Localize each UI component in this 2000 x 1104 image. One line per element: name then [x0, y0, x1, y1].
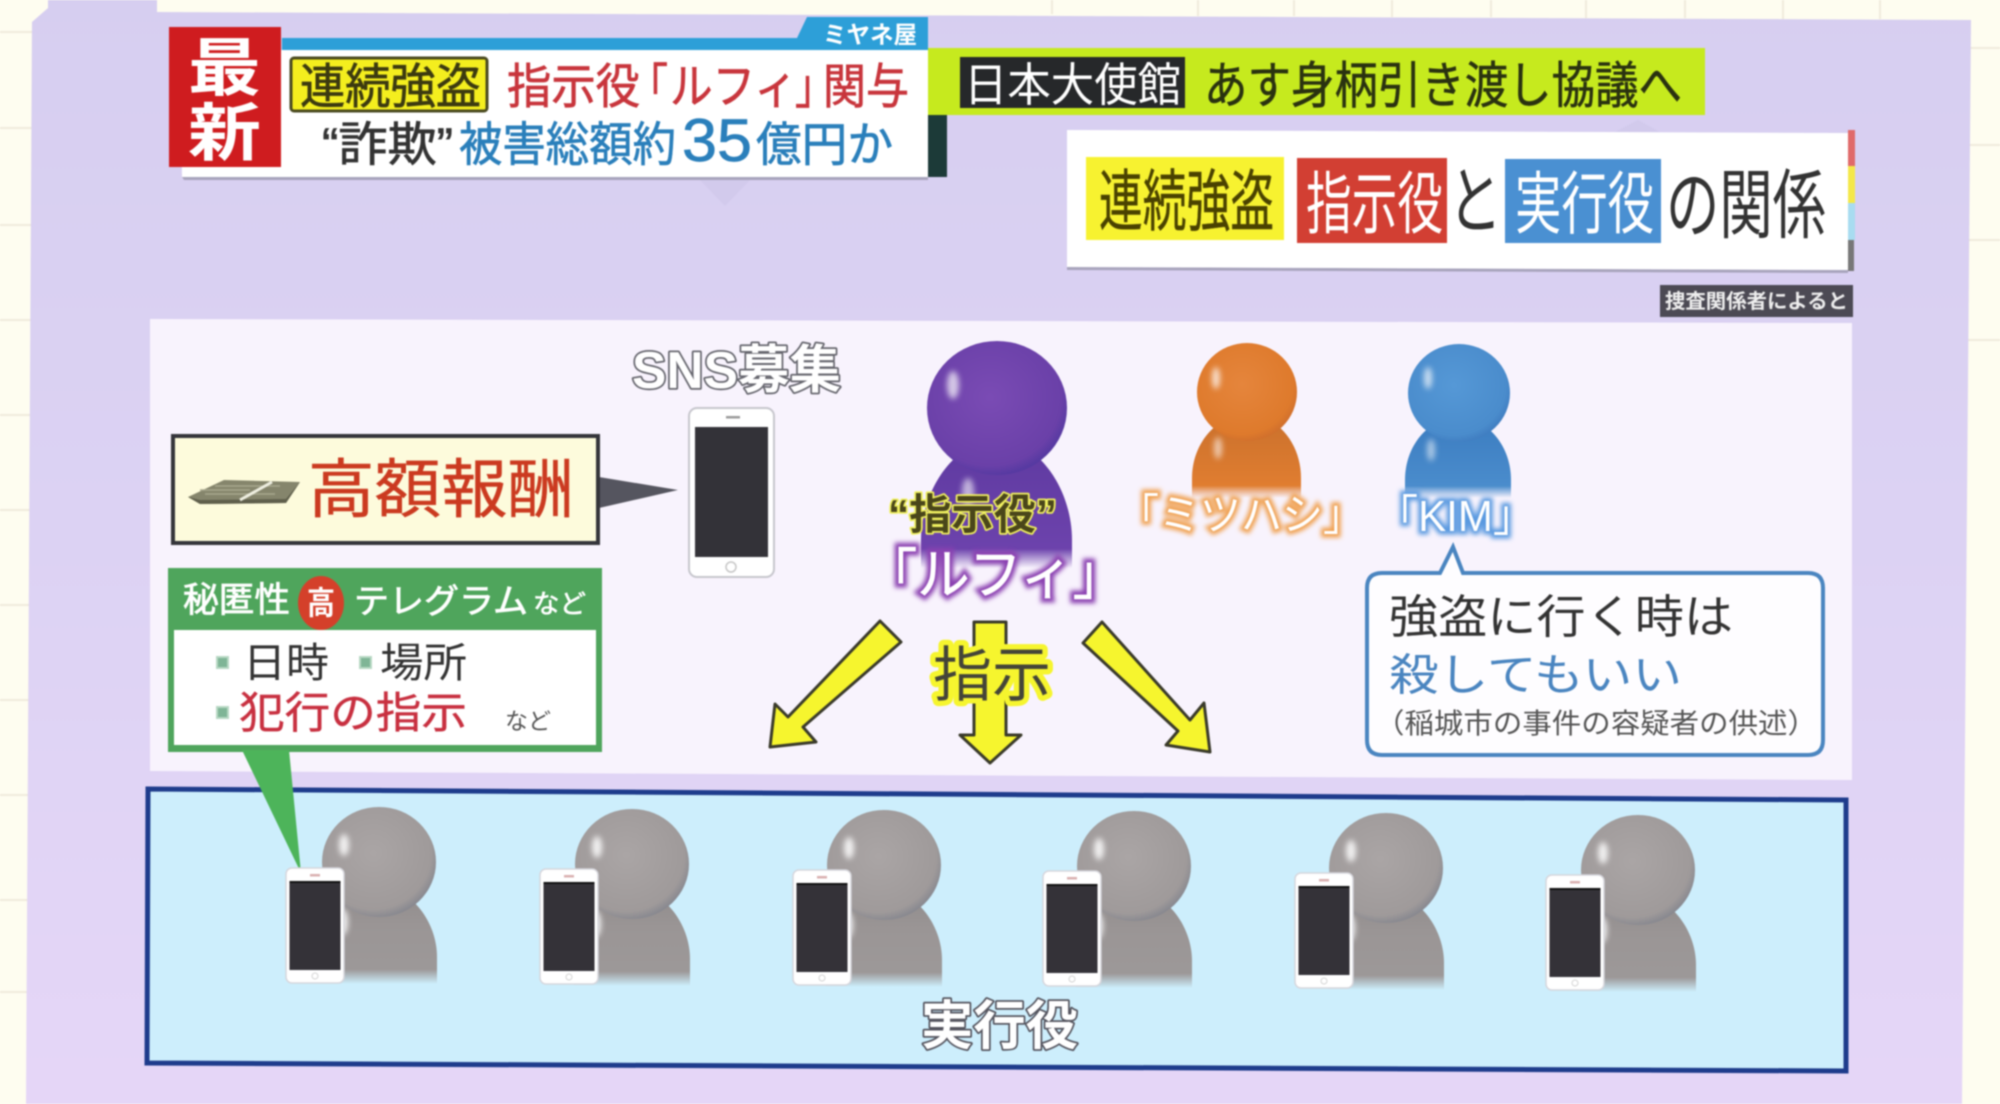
panel: telegram instructions box: [168, 568, 602, 752]
headline line 2 amount: 35: [682, 107, 752, 174]
headline line 1: 」: [795, 61, 835, 114]
blue chip: 実行役: [1515, 167, 1654, 243]
banner blue strip and tab: [282, 17, 928, 50]
callout: high reward: [173, 436, 678, 543]
headline line 1: ルフィ: [670, 61, 797, 114]
tab label: ミヤネ屋: [823, 22, 917, 49]
label: Luffy: 「ルフィ」: [865, 544, 1125, 606]
arrow: down-right: [1083, 622, 1210, 752]
black label: [960, 57, 1185, 108]
header text: 秘匿性: [183, 581, 290, 620]
headline line 2 amount: [459, 107, 893, 174]
particle to: と: [1448, 160, 1502, 243]
label: Mitsuhashi: 「ミツハシ」: [1118, 492, 1364, 540]
headline line 2 quoted: “詐欺”: [322, 118, 453, 171]
nado small: など: [505, 708, 551, 734]
colour strip: [1848, 130, 1855, 271]
heading: SNS recruiting: SNS募集: [632, 342, 841, 400]
arrow: down-left: [770, 621, 901, 747]
line 2: 殺してもいい: [1389, 651, 1682, 700]
label: KIM: 「KIM」: [1376, 492, 1535, 541]
banner white body: [180, 50, 928, 177]
label: KIM: 「KIM」: [1376, 492, 1535, 541]
telegram: テレグラム: [354, 583, 528, 621]
figure: orange Mitsuhashi: [1192, 343, 1301, 498]
figure: executor 3: [793, 810, 942, 987]
label: Mitsuhashi: 「ミツハシ」: [1118, 492, 1364, 540]
yellow chip: 連続強盗: [1099, 165, 1274, 240]
red badge 最新: 新: [188, 99, 261, 169]
red badge: [298, 576, 344, 630]
yellow chip: [1086, 157, 1284, 240]
box: [173, 436, 598, 543]
source tag: [1660, 285, 1853, 317]
figure: purple leader: [921, 341, 1072, 568]
figure: executor 6: [1546, 815, 1696, 992]
crime instruction: 犯行の指示: [239, 690, 467, 738]
figure: executor 1: [286, 807, 437, 984]
banner shadow: [182, 177, 928, 180]
red badge 最新: 最: [188, 34, 261, 104]
label: leader role: “指示役”: [888, 491, 1057, 538]
top-left news banner: [169, 17, 947, 180]
headline line 1: 「: [628, 61, 668, 114]
headline line 1: 指示役: [507, 61, 640, 114]
headline line 2 amount: 被害総額約: [459, 118, 676, 171]
panel: executors: [147, 789, 1846, 1071]
icon: large smartphone: [689, 408, 774, 577]
figure: executor 5: [1295, 813, 1444, 990]
label: instruction: 指示: [933, 642, 1051, 709]
figure: executor 4: [1043, 811, 1192, 988]
source tag: 捜査関係者によると: [1665, 290, 1848, 313]
red badge: 高: [307, 585, 335, 621]
line 1: 強盗に行く時は: [1389, 591, 1733, 643]
label: Luffy: 「ルフィ」: [865, 544, 1125, 606]
red chip: 指示役: [1306, 167, 1443, 243]
nado: など: [533, 589, 586, 619]
title card: [1067, 130, 1855, 273]
red chip: [1297, 158, 1447, 243]
pointer: [599, 477, 678, 508]
headline line 1: 関与: [823, 61, 909, 114]
banner dark strip: [928, 115, 947, 177]
top-right lime banner: [928, 48, 1705, 115]
red badge 最新: [169, 27, 281, 169]
speech bubble: KIM statement: [1367, 547, 1823, 755]
icon: banknotes: [188, 480, 300, 504]
callout tail: telegram box to phone: [242, 750, 301, 873]
place: 場所: [380, 640, 467, 686]
tag 連続強盗: 連続強盗: [300, 61, 481, 114]
bullets: [217, 657, 371, 718]
figure: executor 2: [540, 809, 690, 986]
arrow: down-centre: [960, 622, 1021, 763]
date and time: 日時: [243, 640, 329, 686]
figure: blue KIM: [1405, 344, 1511, 498]
line 3: （稲城市の事件の容疑者の供述）: [1375, 708, 1817, 739]
label: executors: 実行役: [921, 997, 1078, 1056]
text: 高額報酬: [308, 454, 574, 526]
no kankei: の関係: [1666, 164, 1826, 249]
label text: 日本大使館: [964, 59, 1181, 111]
blue chip: [1505, 159, 1661, 243]
headline line 2 amount: 億円か: [756, 118, 893, 171]
panel: white organisers area: [150, 319, 1852, 780]
headline line 1: [507, 61, 909, 114]
banner text: あす身柄引き渡し協議へ: [1204, 58, 1682, 114]
